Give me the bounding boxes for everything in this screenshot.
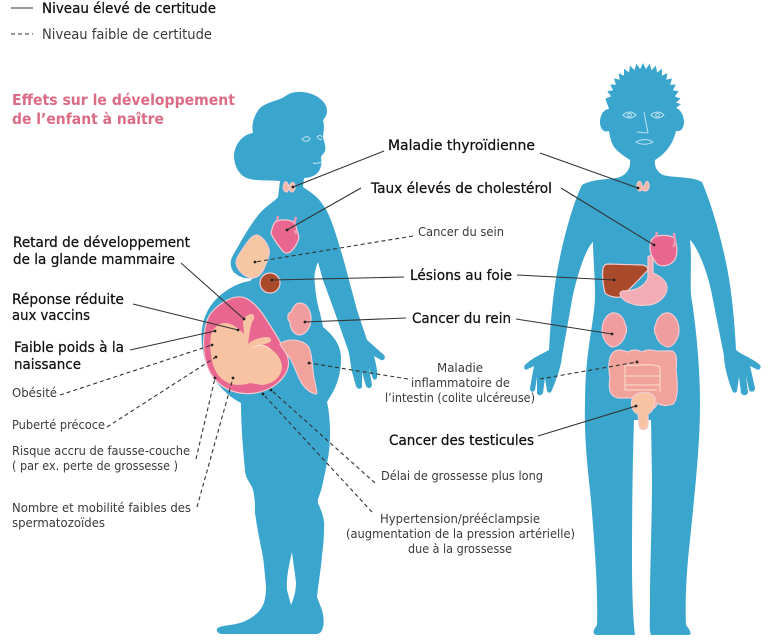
labels: centre: inflammatoire de <box>411 376 510 390</box>
legend: Niveau faible de certitude <box>42 27 212 43</box>
labels: woman side: naissance <box>14 357 81 373</box>
breast <box>236 235 269 278</box>
labels: centre: Cancer du rein <box>412 311 511 327</box>
labels: woman side: aux vaccins <box>12 308 90 324</box>
eyes and mouth: woman <box>302 136 322 163</box>
labels: centre: Maladie <box>437 361 483 375</box>
title: Effets sur le développement <box>12 91 235 109</box>
pregnant woman figure <box>202 92 385 634</box>
labels: centre: due à la grossesse <box>408 542 512 556</box>
gap between the legs <box>287 552 296 605</box>
intestine: child <box>609 350 677 410</box>
callout lines <box>60 151 655 512</box>
labels: woman side: Nombre et mobilité faibles des <box>12 501 191 515</box>
title <box>12 91 235 128</box>
face: child <box>623 112 664 144</box>
heart: child <box>650 232 677 266</box>
labels: centre: Cancer des testicules <box>389 433 534 449</box>
labels: centre: Hypertension/prééclampsie <box>380 512 540 526</box>
labels: centre: Délai de grossesse plus long <box>381 469 543 483</box>
labels: centre: l’intestin (colite ulcéreuse) <box>385 391 535 405</box>
silhouette: child <box>524 63 761 635</box>
labels: centre: Maladie thyroïdienne <box>388 138 535 154</box>
labels: woman side: Faible poids à la <box>14 340 124 356</box>
labels: centre: Taux élevés de cholestérol <box>370 181 552 197</box>
labels: woman side: Réponse réduite <box>12 292 124 308</box>
labels: woman side: Puberté précoce <box>12 418 105 432</box>
silhouette: woman <box>202 92 385 634</box>
labels: woman side: Retard de développement <box>13 235 190 251</box>
labels: woman side: Obésité <box>12 386 57 400</box>
labels: woman side: spermatozoïdes <box>12 516 105 530</box>
labels: woman side: de la glande mammaire <box>13 252 175 268</box>
legend <box>11 1 216 43</box>
labels: centre: Cancer du sein <box>418 225 504 239</box>
stomach: child <box>620 256 667 305</box>
labels: woman side <box>12 235 191 530</box>
thyroid: child <box>637 181 649 191</box>
labels: woman side: Risque accru de fausse-couche <box>12 444 190 458</box>
kidney: child left <box>602 313 626 347</box>
womb <box>204 297 288 394</box>
testicles and penis <box>631 392 655 430</box>
labels: centre <box>346 138 575 556</box>
heart: woman <box>271 216 299 253</box>
kidney: woman <box>288 303 311 335</box>
kidney: child right <box>654 313 679 347</box>
intestine: woman <box>280 340 317 394</box>
thyroid: woman <box>283 182 295 192</box>
title: de l’enfant à naître <box>12 110 164 128</box>
child figure <box>524 63 761 635</box>
labels: woman side: ( par ex. perte de grossesse ) <box>12 459 178 473</box>
legend: Niveau élevé de certitude <box>42 1 216 17</box>
labels: centre: (augmentation de la pression artérielle) <box>346 527 575 541</box>
baby <box>210 314 282 385</box>
liver: woman <box>260 273 280 293</box>
liver: child <box>603 264 648 297</box>
labels: centre: Lésions au foie <box>410 268 512 284</box>
